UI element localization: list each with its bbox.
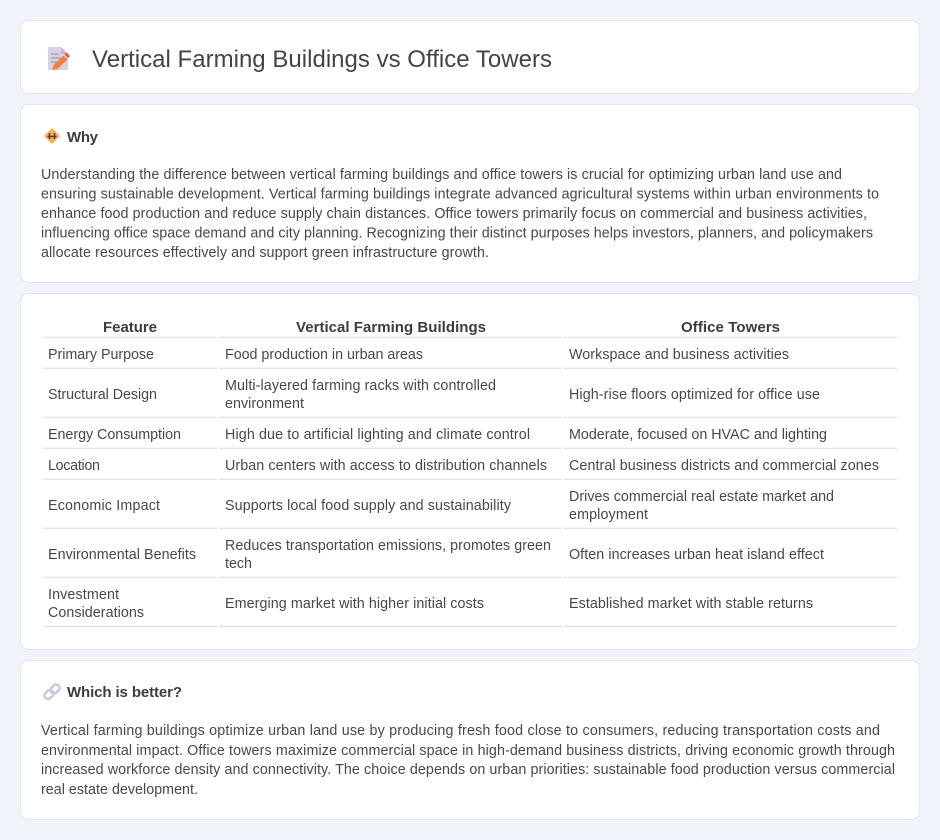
row: location: Location [48, 458, 100, 474]
row: primary purpose: Primary Purpose [48, 347, 154, 363]
row: investment considerations: Investment [48, 587, 119, 603]
row: primary purpose: Workspace and business activities [569, 347, 789, 363]
row: primary purpose: Food production in urban areas [225, 347, 423, 363]
row: investment considerations [48, 587, 813, 621]
text block: which is better paragraph: Vertical farming buildings optimize urban land use by producing fresh food close to consumers, reducing transportation costs and [41, 723, 880, 739]
row: investment considerations: Considerations [48, 605, 144, 621]
text block: why paragraph: ensuring sustainable development. Vertical farming buildings integrate advanced agricultural systems within urban environments to [41, 186, 879, 202]
row: investment considerations: Emerging market with higher initial costs [225, 596, 484, 612]
row: structural design: Structural Design [48, 387, 157, 403]
table header: Vertical Farming Buildings [296, 319, 486, 336]
text block: which is better paragraph: real estate development. [41, 782, 198, 798]
row: structural design: High-rise floors optimized for office use [569, 387, 820, 403]
table header [103, 319, 780, 336]
panel: why [20, 104, 920, 282]
row: environmental benefits [48, 538, 824, 572]
row: structural design: environment [225, 396, 304, 412]
icon: document with pencil [48, 47, 70, 70]
icon: orange diamond [44, 128, 60, 144]
heading: which is better: Which is better? [67, 684, 182, 701]
title: Vertical Farming Buildings vs Office Towers [92, 46, 552, 73]
panel: title card [20, 20, 920, 94]
row: economic impact: Supports local food supply and sustainability [225, 498, 512, 514]
heading: why: Why [67, 129, 99, 146]
row: investment considerations: Established market with stable returns [569, 596, 813, 612]
text block: which is better paragraph [41, 723, 895, 798]
row: energy consumption: High due to artificial lighting and climate control [225, 427, 530, 443]
row: primary purpose [48, 347, 789, 363]
row: economic impact: employment [569, 507, 648, 523]
row: energy consumption: Energy Consumption [48, 427, 181, 443]
text block: which is better paragraph: increased workforce density and connectivity. The choice depends on urban priorities: sustainable food production versus commercial [41, 762, 895, 778]
row: environmental benefits: Often increases urban heat island effect [569, 547, 824, 563]
text block: why paragraph: allocate resources effectively and support green infrastructure growth. [41, 245, 489, 261]
text block: why paragraph: enhance food production and reduce supply chain distances. Office towers primarily focus on commercial and business activities, [41, 206, 867, 222]
panel: comparison table [20, 294, 920, 650]
text block: why paragraph [41, 167, 879, 261]
table header: Feature [103, 319, 157, 336]
text block: which is better paragraph: environmental impact. Office towers maximize commercial space in high-demand business districts, driving economic growth through [41, 743, 895, 759]
icon: chain link [43, 683, 61, 701]
row: energy consumption: Moderate, focused on HVAC and lighting [569, 427, 827, 443]
text block: why paragraph: influencing office space demand and city planning. Recognizing their distinct purposes helps investors, planners, and policymakers [41, 226, 873, 242]
row: location: Urban centers with access to distribution channels [225, 458, 547, 474]
row: economic impact [48, 489, 834, 523]
row: environmental benefits: Reduces transportation emissions, promotes green [225, 538, 551, 554]
row: economic impact: Economic Impact [48, 498, 160, 514]
text block: why paragraph: Understanding the difference between vertical farming buildings and office towers is crucial for optimizing urban land use and [41, 167, 842, 183]
row: structural design: Multi-layered farming racks with controlled [225, 378, 496, 394]
row: location [48, 458, 879, 474]
table header: Office Towers [681, 319, 780, 336]
row: structural design [48, 378, 820, 412]
row: economic impact: Drives commercial real estate market and [569, 489, 834, 505]
panel: which is better [20, 660, 920, 820]
row: environmental benefits: tech [225, 556, 252, 572]
row: location: Central business districts and commercial zones [569, 458, 879, 474]
row: environmental benefits: Environmental Benefits [48, 547, 196, 563]
row: energy consumption [48, 427, 827, 443]
